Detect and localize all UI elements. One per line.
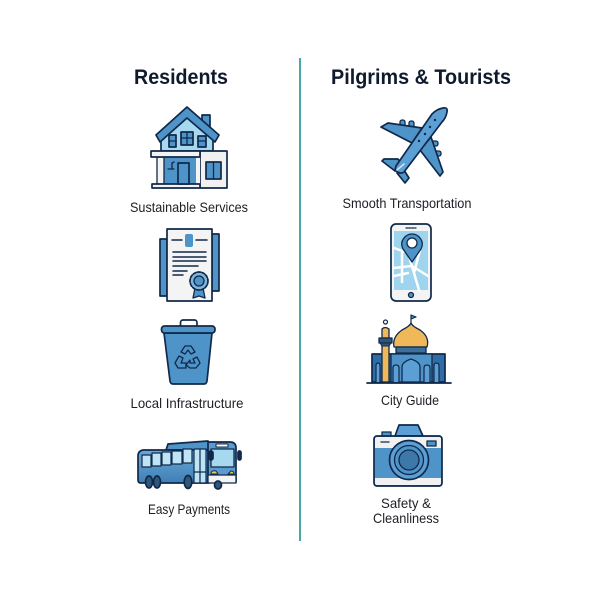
icon: certificate [160,229,219,301]
icon: bus [138,441,241,489]
icon: shrine [367,315,451,383]
icon: camera [374,425,442,486]
label: local infrastructure: Local Infrastructure [130,395,244,411]
label: easy payments: Easy Payments [148,501,230,517]
heading: pilgrims and tourists: Pilgrims & Tourists [331,66,511,89]
panel: pilgrims and tourists [331,66,511,526]
label: smooth transportation: Smooth Transportation [342,195,472,211]
icon: house [151,107,227,188]
icon: phone map [391,224,431,301]
panel: residents [130,66,248,517]
label: safety and cleanliness [373,495,439,526]
label: sustainable services: Sustainable Services [130,199,248,215]
icon: recycling bin [162,320,215,384]
label: safety and cleanliness: Cleanliness [373,510,439,526]
label: safety and cleanliness: Safety & [381,495,432,511]
icon: airplane [381,108,447,183]
label: city guide: City Guide [381,392,439,408]
heading: residents: Residents [134,66,228,89]
